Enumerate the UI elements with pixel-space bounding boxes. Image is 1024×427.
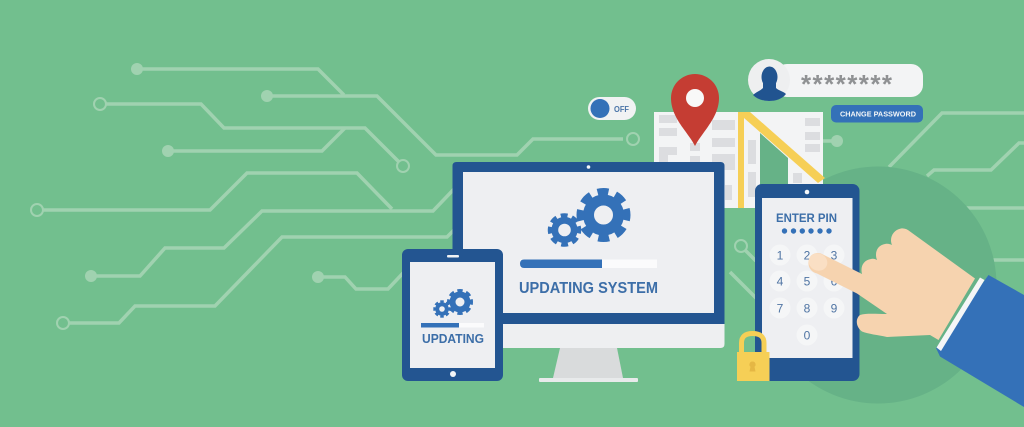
hand pressing the keypad (806, 228, 975, 340)
password field: ******** (801, 69, 893, 99)
background circle behind hand (760, 166, 996, 404)
keypad: 9 (831, 302, 838, 316)
tablet large gear (449, 291, 471, 313)
smartphone (755, 184, 860, 381)
padlock (737, 334, 770, 381)
shirt cuff (936, 278, 984, 351)
keypad: 3 (831, 248, 838, 262)
tablet small gear (435, 302, 449, 316)
updating system label: UPDATING SYSTEM (519, 280, 658, 297)
progress bar (520, 260, 657, 268)
keypad: 0 (804, 328, 811, 342)
keypad (770, 244, 844, 346)
suit sleeve (936, 275, 1024, 407)
change password button: CHANGE PASSWORD (840, 110, 917, 118)
large gear (580, 192, 626, 238)
small gear (550, 216, 578, 244)
map (654, 112, 825, 208)
keypad: 8 (804, 302, 811, 316)
updating label: UPDATING (422, 332, 484, 346)
map pin (671, 74, 719, 146)
toggle switch: off: OFF (614, 105, 629, 114)
keypad: 6 (831, 274, 838, 288)
desktop monitor (452, 162, 724, 382)
change password button (831, 105, 923, 122)
circuit traces background (31, 63, 1024, 329)
enter pin label: ENTER PIN (776, 211, 837, 225)
keypad: 4 (777, 274, 784, 288)
keypad: 2 (804, 248, 811, 262)
password field (748, 59, 923, 101)
pin dots (782, 228, 832, 234)
toggle switch: off (588, 97, 636, 120)
keypad: 5 (804, 274, 811, 288)
tablet progress bar (421, 323, 484, 328)
tablet (402, 249, 503, 381)
keypad: 7 (777, 302, 784, 316)
keypad: 1 (777, 248, 784, 262)
